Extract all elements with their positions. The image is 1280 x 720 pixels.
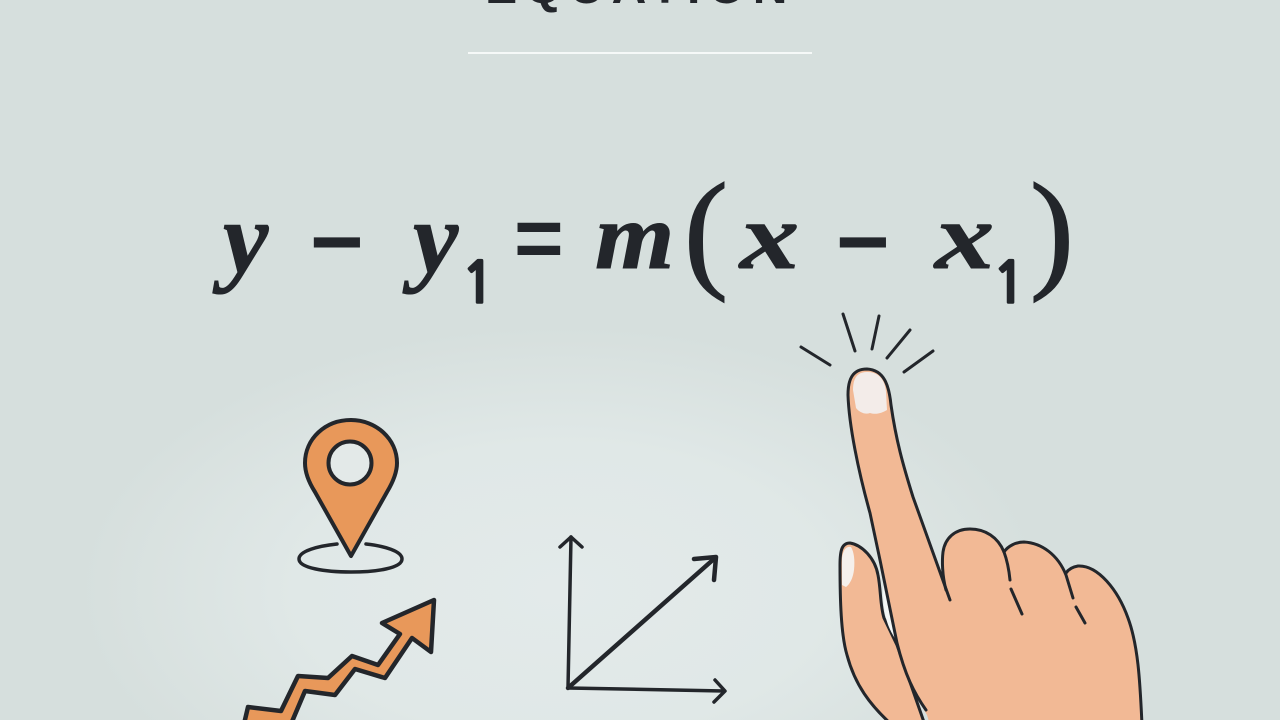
icon: rising zigzag arrow <box>244 600 434 720</box>
icon: index fingernail <box>853 372 887 414</box>
equation: = <box>514 191 564 286</box>
equation: m <box>595 186 674 289</box>
icon: coordinate axes with line <box>560 537 725 702</box>
icon: location pin <box>299 420 402 572</box>
title underline <box>468 52 812 54</box>
equation: y <box>402 182 459 295</box>
icon: pointing hand <box>840 369 1142 720</box>
equation: x <box>738 185 799 289</box>
equation: 1 <box>992 256 1027 312</box>
equation <box>212 156 1074 312</box>
equation: − <box>836 191 890 293</box>
equation: ) <box>1030 156 1074 303</box>
equation: y <box>212 182 269 295</box>
icon: tap sparkle lines <box>801 314 933 372</box>
equation: x <box>933 185 994 289</box>
equation: 1 <box>461 256 496 312</box>
icon: thumbnail <box>842 547 854 587</box>
equation: − <box>310 191 364 293</box>
equation: ( <box>684 156 728 303</box>
